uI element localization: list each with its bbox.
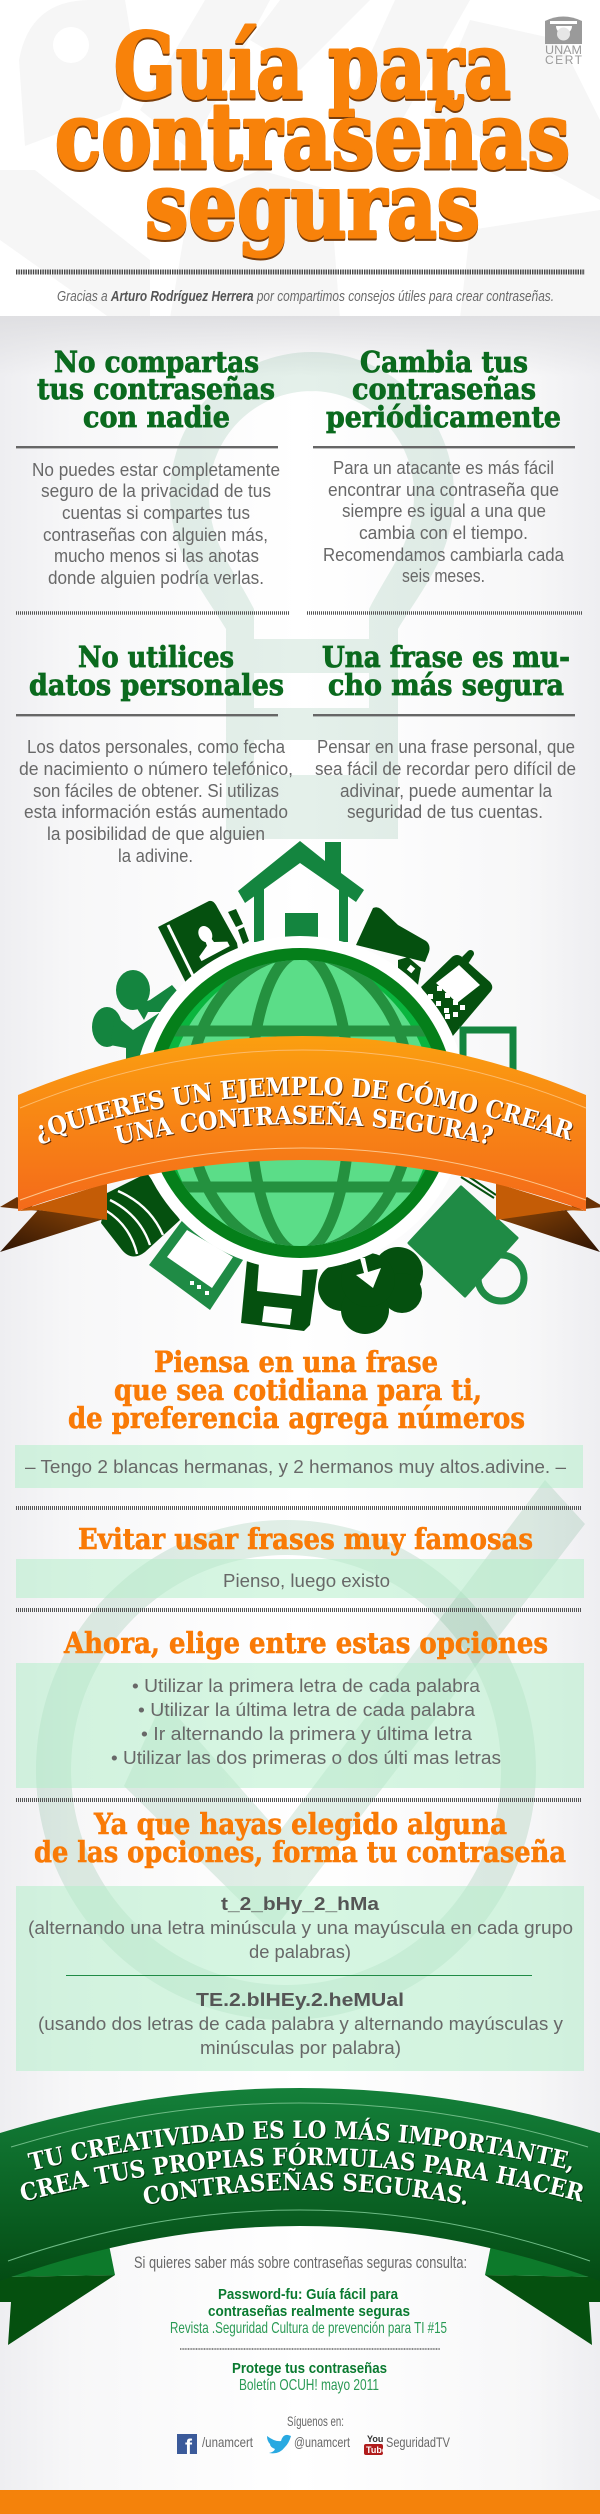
text: cambia: siempre es igual a una que bbox=[342, 501, 546, 521]
header background pattern bbox=[0, 0, 600, 318]
icon: house bbox=[238, 841, 364, 942]
icon: floppy disk bbox=[241, 1260, 318, 1331]
text: no utilices: son fáciles de obtener. Si utilizas bbox=[33, 781, 279, 801]
text: no compartas bbox=[32, 460, 280, 588]
box: contraseñas ejemplo bbox=[16, 1886, 584, 2071]
heading: cambia: Cambia tus bbox=[360, 345, 528, 379]
dividers mid bbox=[16, 611, 582, 615]
heading: piensa: que sea cotidiana para ti, bbox=[114, 1373, 482, 1407]
text: una frase: Pensar en una frase personal, que bbox=[317, 737, 575, 757]
heading: ahora: Ahora, elige entre estas opciones bbox=[63, 1626, 548, 1660]
box: opciones: • Ir alternando la primera y última letra bbox=[141, 1724, 473, 1744]
box: frase ejemplo bbox=[15, 1445, 583, 1488]
panel: no compartas bbox=[16, 345, 280, 588]
logo: UNAM CERT: UNAM bbox=[545, 43, 582, 57]
banner question text: ¿QUIERES UN EJEMPLO DE CÓMO CREAR bbox=[38, 1076, 574, 1145]
heading: una frase: cho más segura bbox=[328, 668, 564, 702]
text: no utilices: la adivine. bbox=[118, 846, 193, 866]
box: contraseñas ejemplo: de palabras) bbox=[249, 1942, 351, 1962]
icon: battery bbox=[101, 1173, 180, 1257]
text: no utilices: de nacimiento o número telefónico, bbox=[19, 759, 293, 779]
social: youtube: SeguridadTV bbox=[386, 2434, 451, 2450]
text: no utilices: Los datos personales, como fecha bbox=[27, 737, 286, 757]
box: opciones bbox=[16, 1663, 584, 1788]
heading: una frase bbox=[322, 640, 570, 702]
heading: no compartas: tus contraseñas bbox=[37, 372, 275, 406]
text: no utilices bbox=[19, 737, 293, 866]
banner question text: UNA CONTRASEÑA SEGURA? bbox=[114, 1101, 494, 1145]
box: opciones: • Utilizar las dos primeras o dos últi mas letras bbox=[111, 1748, 501, 1768]
reference: protege bbox=[232, 2360, 387, 2394]
heading: no compartas: con nadie bbox=[83, 400, 230, 434]
text: una frase: adivinar, puede aumentar la bbox=[340, 781, 553, 801]
title bbox=[55, 13, 570, 259]
text: no utilices: esta información estás aumentado bbox=[24, 802, 288, 822]
text: cambia: cambia con el tiempo. bbox=[359, 523, 528, 543]
heading: no compartas bbox=[37, 345, 275, 434]
social: youtube: Tube bbox=[366, 2445, 387, 2455]
reference: password-fu: Revista .Seguridad Cultura de prevención para TI #15 bbox=[170, 2320, 447, 2337]
social: twitter bbox=[267, 2434, 350, 2453]
reference: password-fu: contraseñas realmente seguras bbox=[208, 2303, 410, 2320]
title: seguras bbox=[145, 153, 480, 259]
heading: no utilices: datos personales bbox=[29, 668, 284, 702]
text: síguenos: Síguenos en: bbox=[287, 2413, 344, 2429]
text: una frase: sea fácil de recordar pero difícil de bbox=[315, 759, 576, 779]
text: una frase bbox=[315, 737, 576, 822]
social: facebook: f bbox=[185, 2436, 193, 2459]
box: contraseñas ejemplo: TE.2.blHEy.2.heMUal bbox=[196, 1990, 404, 2010]
text: no compartas: mucho menos si las anotas bbox=[54, 546, 259, 566]
box: frase ejemplo: – Tengo 2 blancas hermanas, y 2 hermanos muy altos.adivine. – bbox=[25, 1457, 566, 1477]
watermark: light bulb bbox=[170, 352, 454, 839]
box: pienso: Pienso, luego existo bbox=[223, 1571, 390, 1591]
icon: cloud with arrow bbox=[318, 1247, 423, 1334]
reference: password-fu: Password-fu: Guía fácil para bbox=[218, 2286, 399, 2303]
icon: talking heads bbox=[92, 970, 185, 1075]
heading: ya que hayas: Ya que hayas elegido alguna bbox=[93, 1807, 507, 1841]
box: opciones: • Utilizar la última letra de cada palabra bbox=[138, 1700, 476, 1720]
text: no utilices: la posibilidad de que alguien bbox=[47, 824, 265, 844]
text: más información: Si quieres saber más sobre contraseñas seguras consulta: bbox=[134, 2253, 467, 2272]
banner: orange ribbon bbox=[18, 1036, 586, 1211]
text: cambia: encontrar una contraseña que bbox=[328, 480, 559, 500]
heading: piensa bbox=[68, 1345, 525, 1435]
heading: ya que hayas bbox=[34, 1807, 566, 1869]
text: no compartas: No puedes estar completamente bbox=[32, 460, 280, 480]
social: facebook bbox=[177, 2434, 253, 2459]
text: no compartas: contraseñas con alguien más, bbox=[43, 525, 268, 545]
divider header bbox=[16, 270, 585, 274]
watermark: check in circle bbox=[36, 1480, 585, 2020]
social: facebook: /unamcert bbox=[202, 2434, 253, 2450]
text: cambia: Recomendamos cambiarla cada bbox=[323, 545, 565, 565]
heading: no compartas: No compartas bbox=[54, 345, 259, 379]
heading: cambia: contraseñas bbox=[352, 372, 536, 406]
icon: monitor bbox=[463, 1030, 513, 1080]
banner closing text: CONTRASEÑAS SEGURAS. bbox=[144, 2168, 467, 2206]
social: youtube bbox=[364, 2434, 451, 2455]
heading: cambia bbox=[326, 345, 561, 434]
box: pienso bbox=[16, 1559, 584, 1598]
text: cambia bbox=[323, 458, 565, 586]
panel: no utilices bbox=[16, 640, 293, 866]
box: contraseñas ejemplo: (alternando una letra minúscula y una mayúscula en cada grupo bbox=[28, 1918, 573, 1938]
logo: UNAM CERT: CERT bbox=[545, 53, 583, 67]
reference: protege: Protege tus contraseñas bbox=[232, 2360, 387, 2377]
ribbon tails green bbox=[0, 2245, 600, 2345]
ribbon tails orange bbox=[0, 1183, 600, 1252]
text: cambia: seis meses. bbox=[402, 566, 485, 586]
heading: piensa: de preferencia agrega números bbox=[68, 1401, 525, 1435]
footer bar bbox=[0, 2490, 600, 2514]
text: no compartas: donde alguien podría verlas. bbox=[48, 568, 264, 588]
icon: contact book bbox=[158, 901, 249, 990]
icon: mobile phone bbox=[421, 950, 492, 1037]
heading: una frase: Una frase es mu- bbox=[322, 640, 570, 674]
box: contraseñas ejemplo: minúsculas por palabra) bbox=[200, 2038, 401, 2058]
icon: folder and usb bbox=[356, 907, 430, 985]
box: contraseñas ejemplo: (usando dos letras de cada palabra y alternando mayúsculas y bbox=[38, 2014, 563, 2034]
box: opciones: • Utilizar la primera letra de cada palabra bbox=[132, 1676, 481, 1696]
banner closing text: CREA TUS PROPIAS FÓRMULAS PARA HACER bbox=[20, 2142, 584, 2203]
text: una frase: seguridad de tus cuentas. bbox=[347, 802, 543, 822]
social: youtube: You bbox=[367, 2434, 383, 2444]
logo: UNAM CERT bbox=[545, 16, 583, 67]
text: no compartas: seguro de la privacidad de tus bbox=[41, 481, 271, 501]
heading: evitar: Evitar usar frases muy famosas bbox=[78, 1522, 533, 1556]
heading: no utilices bbox=[29, 640, 284, 702]
icon: padlock bbox=[409, 1176, 524, 1301]
social: twitter: @unamcert bbox=[294, 2434, 350, 2450]
box: contraseñas ejemplo: t_2_bHy_2_hMa bbox=[221, 1894, 380, 1914]
heading: no utilices: No utilices bbox=[78, 640, 234, 674]
reference: protege: Boletín OCUH! mayo 2011 bbox=[239, 2377, 379, 2394]
panel: cambia tus contraseñas bbox=[313, 345, 575, 586]
banner closing text: TU CREATIVIDAD ES LO MÁS IMPORTANTE, bbox=[27, 2118, 573, 2174]
text: cambia: Para un atacante es más fácil bbox=[333, 458, 554, 478]
globe bbox=[133, 936, 467, 1270]
heading: cambia: periódicamente bbox=[326, 400, 561, 434]
top shading band bbox=[0, 316, 600, 376]
reference: password-fu bbox=[170, 2286, 447, 2337]
icon: tablet bbox=[149, 1218, 245, 1310]
heading: piensa: Piensa en una frase bbox=[154, 1345, 438, 1379]
banner: green ribbon bbox=[0, 2088, 600, 2277]
text: no compartas: cuentas si compartes tus bbox=[62, 503, 250, 523]
panel: una frase bbox=[313, 640, 576, 822]
title: Guía para bbox=[114, 13, 511, 119]
